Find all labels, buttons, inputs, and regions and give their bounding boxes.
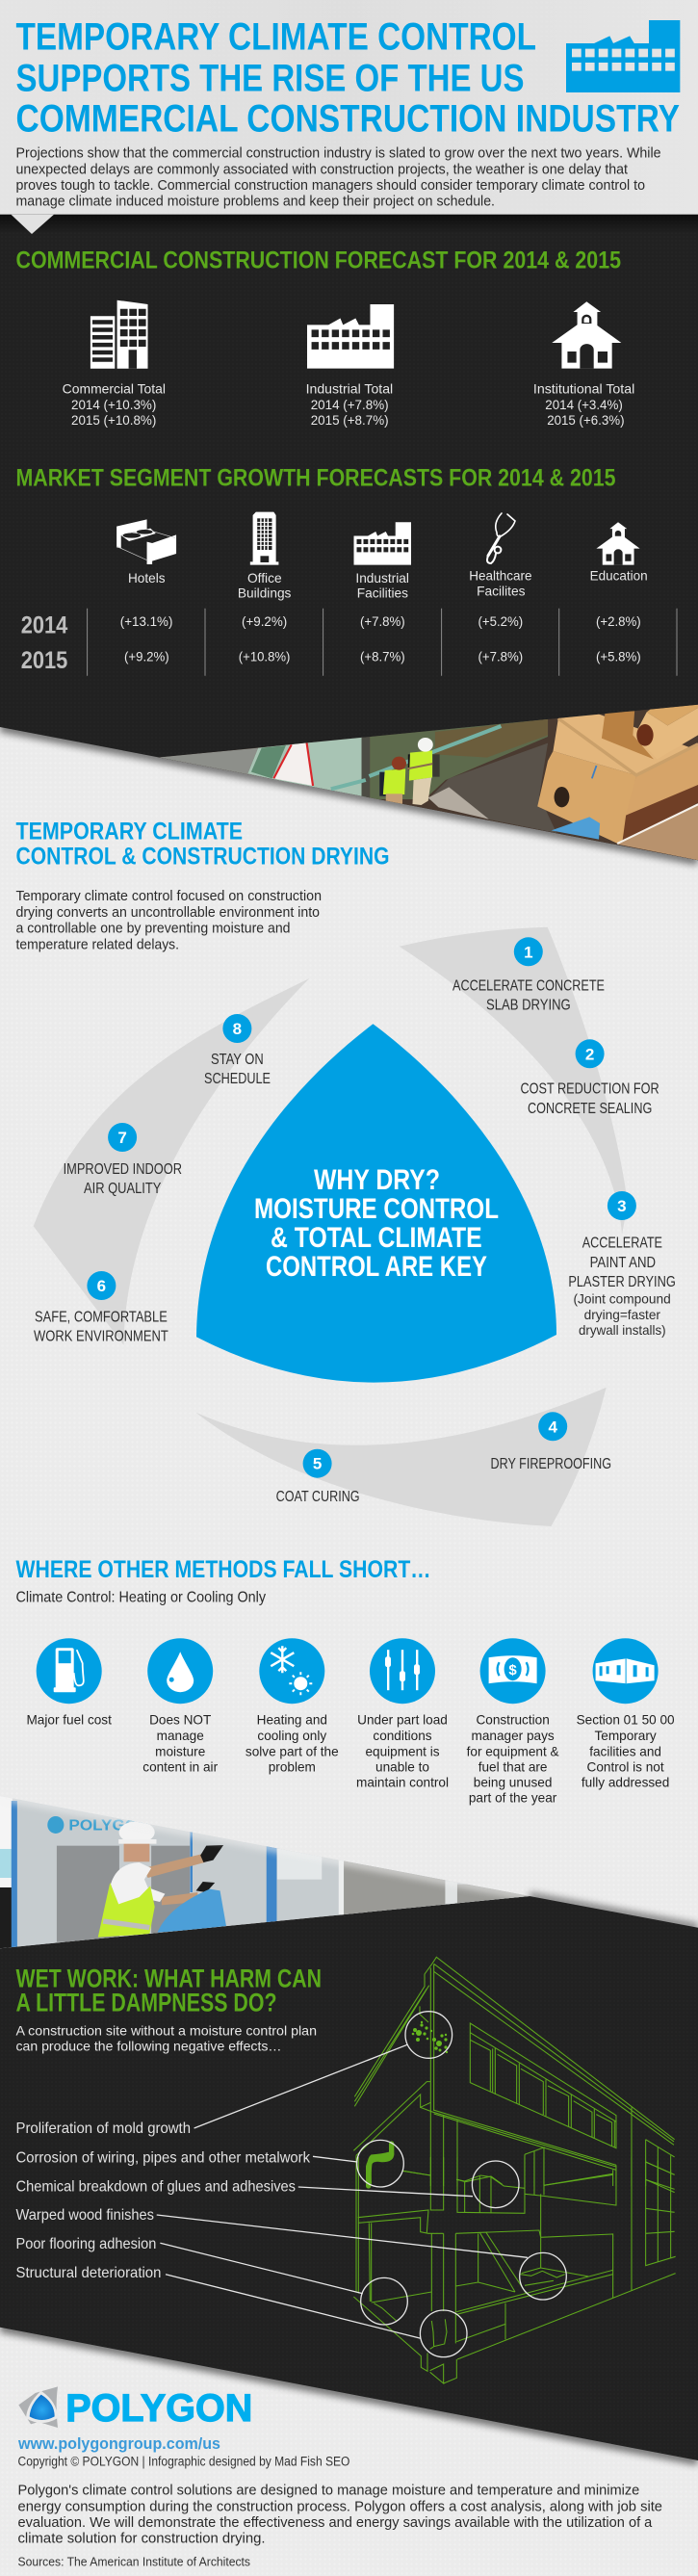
shortfall: section 01 50 00: Temporary bbox=[594, 1729, 657, 1743]
shortfall: unused equipment bbox=[467, 1638, 559, 1806]
wordmark: POLYGON bbox=[65, 2387, 252, 2430]
heading: temporary climate control & construction drying: CONTROL & CONSTRUCTION DRYING bbox=[15, 844, 389, 871]
icon: sliders bbox=[385, 1650, 420, 1690]
icon: office buildings bbox=[90, 300, 148, 369]
shortfall: section 01 50 00: facilities and bbox=[589, 1744, 661, 1758]
website: www.polygongroup.com/us bbox=[17, 2434, 220, 2453]
2014 values: (+5.2%) bbox=[478, 614, 523, 629]
shortfall: part of problem bbox=[246, 1638, 339, 1774]
logo on unit: POLYGON bbox=[68, 1816, 149, 1834]
2015 values: (+8.7%) bbox=[360, 650, 405, 664]
label: Industrial Total bbox=[306, 382, 393, 397]
step 8: STAY ON bbox=[211, 1052, 264, 1068]
heading: market segment: MARKET SEGMENT GROWTH FORECASTS FOR 2014 & 2015 bbox=[15, 464, 616, 491]
shortfall: part load: conditions bbox=[373, 1729, 432, 1743]
step 3 bbox=[568, 1191, 676, 1338]
icon: fuel pump bbox=[54, 1648, 84, 1692]
label: 2014 (+10.3%) bbox=[71, 398, 156, 412]
icon: office tower bbox=[250, 512, 278, 565]
sources: Sources: The American Institute of Architects bbox=[17, 2556, 250, 2569]
centre text: MOISTURE CONTROL bbox=[254, 1193, 499, 1225]
step 2 bbox=[520, 1039, 659, 1117]
pointer notch bbox=[12, 215, 54, 234]
step 7 bbox=[64, 1123, 182, 1197]
step 2: CONCRETE SEALING bbox=[528, 1101, 652, 1117]
paragraph: drying intro: Temporary climate control focused on construction bbox=[15, 889, 322, 904]
title: SUPPORTS THE RISE OF THE US bbox=[15, 57, 524, 99]
label: Industrial Facilities bbox=[355, 571, 409, 601]
shortfall: moisture: content in air bbox=[142, 1759, 219, 1774]
heading: temporary climate control & construction drying bbox=[15, 819, 389, 871]
step 6: 6 bbox=[97, 1277, 106, 1295]
label: 2015 (+10.8%) bbox=[71, 413, 156, 428]
centre text: CONTROL ARE KEY bbox=[266, 1251, 487, 1283]
paragraph: drying intro: temperature related delays. bbox=[15, 937, 179, 952]
shortfall: unused equipment: Construction bbox=[476, 1713, 550, 1728]
title: TEMPORARY CLIMATE CONTROL bbox=[15, 16, 536, 59]
label bbox=[306, 382, 393, 428]
label: Industrial Facilities: Facilities bbox=[357, 586, 408, 601]
copyright: Copyright © POLYGON | Infographic designed by Mad Fish SEO bbox=[17, 2455, 349, 2469]
step 7: 7 bbox=[117, 1129, 127, 1147]
shortfall: unused equipment: for equipment & bbox=[467, 1744, 559, 1758]
icon: bed bbox=[116, 519, 176, 564]
step 1: SLAB DRYING bbox=[486, 998, 571, 1014]
shortfall: part load: maintain control bbox=[356, 1776, 449, 1789]
closing paragraph bbox=[17, 2484, 662, 2547]
2015 values: (+7.8%) bbox=[478, 650, 523, 664]
icon: banknote bbox=[489, 1655, 537, 1683]
step 1: 1 bbox=[524, 943, 533, 961]
shortfall: section 01 50 00: Control is not bbox=[587, 1759, 664, 1774]
shortfall: moisture: Does NOT bbox=[149, 1713, 211, 1728]
shortfall: moisture: manage bbox=[157, 1729, 204, 1743]
intro text: can produce the following negative effects… bbox=[15, 2038, 282, 2053]
worker in orange helmet bbox=[379, 757, 406, 804]
icon: banknote: $ bbox=[508, 1662, 517, 1678]
title bbox=[15, 16, 680, 141]
intro paragraph bbox=[15, 145, 660, 210]
icon: schoolhouse bbox=[552, 301, 621, 369]
building wireframe bbox=[353, 1957, 676, 2383]
shortfall: part of problem: Heating and bbox=[257, 1713, 327, 1728]
intro paragraph: manage climate induced moisture problems and keep their project on schedule. bbox=[15, 195, 495, 210]
2015 values bbox=[124, 650, 641, 664]
paragraph: drying intro: a controllable one by preventing moisture and bbox=[15, 922, 291, 937]
shortfall: part load: equipment is bbox=[365, 1744, 440, 1758]
shadow along upper wedge edge bbox=[530, 1896, 698, 1928]
shortfall: unused equipment: manager pays bbox=[472, 1729, 555, 1743]
closing paragraph: energy consumption during the construction process. Polygon offers a cost analysis, along with job site bbox=[17, 2499, 662, 2514]
step 3: drywall installs) bbox=[579, 1323, 666, 1338]
2015 values: (+10.8%) bbox=[239, 650, 290, 664]
effects list bbox=[15, 2121, 311, 2281]
effects list: Chemical breakdown of glues and adhesives bbox=[15, 2178, 296, 2195]
shortfall: part of problem: cooling only bbox=[257, 1729, 326, 1743]
leader lines and callout circles bbox=[157, 2012, 566, 2357]
step 7: AIR QUALITY bbox=[84, 1181, 162, 1197]
shortfall: moisture bbox=[142, 1638, 219, 1774]
label bbox=[63, 382, 166, 428]
shortfall: section 01 50 00: Section 01 50 00 bbox=[577, 1713, 675, 1728]
step 6: SAFE, COMFORTABLE bbox=[35, 1309, 168, 1325]
2014 values: (+7.8%) bbox=[360, 614, 405, 629]
2014 values bbox=[120, 614, 641, 629]
2015 values: (+9.2%) bbox=[124, 650, 169, 664]
diagram: why dry bbox=[34, 927, 676, 1526]
label: 2015 (+8.7%) bbox=[311, 413, 389, 428]
step 4: DRY FIREPROOFING bbox=[491, 1456, 611, 1472]
worker in white helmet bbox=[407, 738, 440, 805]
swoosh: steps 1 to 3 bbox=[400, 927, 628, 1235]
subheading: Climate Control: Heating or Cooling Only bbox=[15, 1589, 266, 1605]
step 2: 2 bbox=[585, 1045, 594, 1063]
year labels: 2014 bbox=[21, 611, 67, 638]
icon: snowflake and sun bbox=[271, 1646, 312, 1695]
centre text bbox=[254, 1164, 499, 1283]
label: 2014 (+3.4%) bbox=[545, 398, 623, 412]
icon: small schoolhouse bbox=[596, 522, 640, 565]
effects list: Corrosion of wiring, pipes and other metalwork bbox=[15, 2149, 311, 2166]
label: 2015 (+6.3%) bbox=[547, 413, 625, 428]
label: Office Buildings bbox=[238, 571, 292, 601]
closing paragraph: climate solution for construction drying. bbox=[17, 2532, 266, 2547]
heading: temporary climate control & construction drying: TEMPORARY CLIMATE bbox=[15, 819, 243, 846]
icon: blue factory bbox=[566, 20, 680, 92]
icon: drop bbox=[167, 1652, 194, 1692]
step 2: COST REDUCTION FOR bbox=[520, 1081, 659, 1098]
2014 values: (+13.1%) bbox=[120, 614, 172, 629]
label: Healthcare Facilites: Healthcare bbox=[469, 568, 531, 583]
icon: temporary buildings bbox=[596, 1658, 655, 1683]
shortfall: major fuel cost bbox=[26, 1638, 112, 1728]
shortfall: part of problem: solve part of the bbox=[246, 1744, 339, 1758]
step 4: 4 bbox=[548, 1418, 557, 1436]
step 5 bbox=[276, 1449, 360, 1505]
step 8: SCHEDULE bbox=[204, 1071, 271, 1087]
shortfall: section 01 50 00: fully addressed bbox=[582, 1776, 669, 1789]
swoosh: steps 4 and 5 bbox=[195, 1388, 607, 1526]
heading: where other methods fall short: WHERE OTHER METHODS FALL SHORT… bbox=[15, 1556, 431, 1583]
paragraph: drying intro bbox=[15, 889, 322, 952]
step 3: 3 bbox=[617, 1197, 627, 1215]
heading: wet work: WET WORK: WHAT HARM CAN bbox=[15, 1964, 322, 1992]
shortfall: part of problem: problem bbox=[269, 1759, 316, 1774]
technician bbox=[98, 1821, 223, 1938]
step 4 bbox=[491, 1412, 611, 1472]
heading: wet work bbox=[15, 1964, 322, 2017]
step 1 bbox=[452, 937, 605, 1014]
shortfall: section 01 50 00 bbox=[577, 1638, 675, 1789]
intro paragraph: proves tough to tackle. Commercial construction managers should consider temporary climate control to bbox=[15, 178, 645, 194]
centre text: & TOTAL CLIMATE bbox=[271, 1222, 482, 1254]
closing paragraph: evaluation. We will demonstrate the effectiveness and energy savings available with the utilization of a bbox=[17, 2515, 653, 2531]
shortfall: moisture: moisture bbox=[155, 1744, 205, 1758]
label: Healthcare Facilites: Facilites bbox=[477, 584, 526, 598]
2014 values: (+9.2%) bbox=[242, 614, 287, 629]
2014 values: (+2.8%) bbox=[596, 614, 641, 629]
drying units bbox=[537, 705, 698, 860]
label: Hotels: Hotels bbox=[128, 571, 166, 585]
effects list: Poor flooring adhesion bbox=[15, 2236, 156, 2252]
photo: workers on site with drying equipment bbox=[154, 703, 698, 867]
intro text bbox=[15, 2022, 317, 2053]
column: industrial total bbox=[306, 304, 394, 428]
table: growth by year bbox=[21, 609, 677, 676]
panel: wet work (dark) bbox=[0, 1896, 698, 2460]
shortfall: unused equipment: fuel that are bbox=[478, 1759, 547, 1774]
label: Office Buildings: Buildings bbox=[238, 586, 292, 601]
intro text: A construction site without a moisture control plan bbox=[15, 2022, 317, 2038]
column: institutional total bbox=[533, 301, 634, 428]
heading: wet work: A LITTLE DAMPNESS DO? bbox=[15, 1989, 277, 2017]
step 8: 8 bbox=[233, 1020, 242, 1038]
step 3: ACCELERATE bbox=[582, 1236, 662, 1252]
light wedge shadow below forecast panel bbox=[0, 727, 698, 860]
shortfall: part load: unable to bbox=[375, 1759, 429, 1774]
effects list: Warped wood finishes bbox=[15, 2207, 154, 2224]
panel: forecast (dark) bbox=[0, 215, 698, 860]
column: commercial total bbox=[63, 300, 166, 428]
effects list: Proliferation of mold growth bbox=[15, 2121, 191, 2137]
step 8 bbox=[204, 1014, 271, 1087]
step 3: drying=faster bbox=[584, 1308, 660, 1322]
paragraph: drying intro: drying converts an uncontrollable environment into bbox=[15, 905, 320, 921]
intro paragraph: Projections show that the commercial construction industry is slated to grow over the next two years. While bbox=[15, 145, 660, 161]
shortfall: part load: Under part load bbox=[357, 1713, 448, 1728]
step 1: ACCELERATE CONCRETE bbox=[452, 977, 605, 994]
step 5: 5 bbox=[313, 1455, 322, 1473]
shortfall: part load bbox=[356, 1638, 449, 1789]
label: Healthcare Facilites bbox=[469, 568, 531, 598]
panel: header bbox=[0, 0, 698, 215]
logo: Polygon bbox=[18, 2386, 252, 2430]
step 3: (Joint compound bbox=[574, 1292, 671, 1306]
icon: stethoscope bbox=[487, 513, 515, 563]
shortfall: major fuel cost: Major fuel cost bbox=[26, 1713, 112, 1728]
centre text: WHY DRY? bbox=[314, 1164, 440, 1196]
step 3: PAINT AND bbox=[590, 1255, 656, 1271]
swoosh: steps 6 to 8 bbox=[34, 978, 309, 1345]
label: Institutional Total bbox=[533, 382, 634, 397]
label: Commercial Total bbox=[63, 382, 166, 397]
step 6 bbox=[34, 1271, 168, 1344]
step 5: COAT CURING bbox=[276, 1489, 360, 1505]
shortfall: unused equipment: part of the year bbox=[469, 1791, 557, 1806]
icon: small factory bbox=[354, 522, 411, 565]
year labels bbox=[21, 611, 67, 674]
blue duct bbox=[158, 1889, 226, 1933]
centre shield bbox=[196, 1024, 556, 1383]
label: Industrial Facilities: Industrial bbox=[355, 571, 409, 585]
icon: factory bbox=[307, 304, 394, 369]
logo mark bbox=[18, 2386, 58, 2428]
edge fade bbox=[0, 1796, 530, 1896]
shortfall: unused equipment: being unused bbox=[474, 1776, 552, 1789]
effects list: Structural deterioration bbox=[15, 2265, 161, 2281]
label: Office Buildings: Office bbox=[247, 571, 282, 585]
year labels: 2015 bbox=[21, 647, 67, 674]
label: Education: Education bbox=[590, 568, 648, 583]
photo: technician with Polygon unit bbox=[0, 1791, 540, 1955]
mold spots bbox=[412, 2021, 448, 2053]
step 7: IMPROVED INDOOR bbox=[64, 1161, 182, 1178]
2015 values: (+5.8%) bbox=[596, 650, 641, 664]
label: 2014 (+7.8%) bbox=[311, 398, 389, 412]
intro paragraph: unexpected delays are commonly associated with construction projects, the weather is one delay that bbox=[15, 162, 628, 177]
closing paragraph: Polygon's climate control solutions are designed to manage moisture and temperature and minimize bbox=[17, 2484, 639, 2499]
label bbox=[533, 382, 634, 428]
step 6: WORK ENVIRONMENT bbox=[34, 1328, 168, 1344]
